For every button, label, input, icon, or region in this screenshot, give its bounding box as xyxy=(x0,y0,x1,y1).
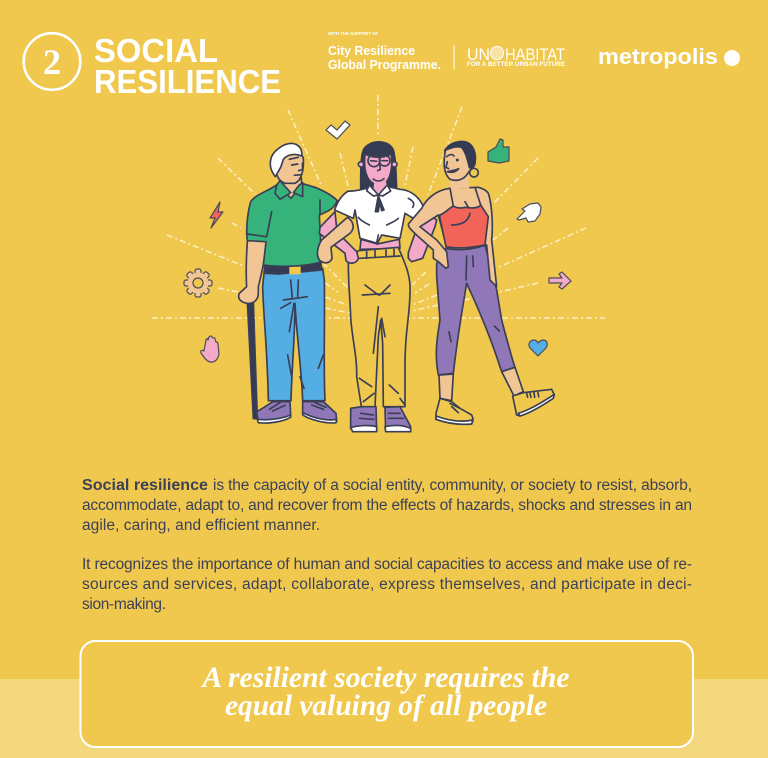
supporter logos: UN xyxy=(467,45,490,64)
icon: thumbs up xyxy=(488,139,509,163)
icon: arrow xyxy=(549,272,571,289)
supporter logos xyxy=(328,31,565,72)
section number badge: 2 xyxy=(43,42,61,82)
people illustration xyxy=(239,141,554,432)
supporter logos: HABITAT xyxy=(505,45,565,64)
callout xyxy=(80,641,693,747)
supporter logos: City Resilience xyxy=(328,44,415,58)
icon: gear xyxy=(184,269,212,297)
icon: pointing hand xyxy=(517,203,541,222)
supporter logos: FOR A BETTER URBAN FUTURE xyxy=(467,61,565,68)
icon: check mark xyxy=(326,121,350,139)
icon: heart xyxy=(529,340,547,356)
metropolis logo: metropolis xyxy=(598,44,718,69)
title xyxy=(94,32,281,100)
middle woman xyxy=(335,142,423,432)
body text: definition: Social resilience xyxy=(82,477,208,494)
section number badge xyxy=(24,33,80,90)
supporter logos: WITH THE SUPPORT OF xyxy=(328,31,378,36)
body text: definition: is the capacity of a social entity, community, or society to resist, absorb, xyxy=(213,477,692,494)
body text: definition: agile, caring, and efficient manner. xyxy=(82,517,320,534)
right woman xyxy=(408,141,554,424)
body text: definition: accommodate, adapt to, and recover from the effects of hazards, shocks and stresses in an xyxy=(82,497,692,514)
body text: human and social capacities xyxy=(82,556,692,613)
callout: equal valuing of all people xyxy=(225,690,547,722)
title: RESILIENCE xyxy=(94,63,281,100)
body text: human and social capacities: sources and services, adapt, collaborate, express themselves, and participate in deci- xyxy=(82,576,692,593)
icon: lightning bolt xyxy=(210,202,223,228)
interlinked arms xyxy=(317,210,437,263)
body text: human and social capacities: It recognizes the importance of human and social capacities to access and make use of re- xyxy=(82,556,692,573)
title: SOCIAL xyxy=(94,32,218,69)
body text: human and social capacities: sion-making. xyxy=(82,596,166,613)
icon: raised hand xyxy=(201,336,219,362)
supporter logos: Global Programme. xyxy=(328,58,441,72)
man with cane xyxy=(239,143,337,423)
callout: A resilient society requires the xyxy=(200,662,569,694)
radiating dashed rays xyxy=(152,95,605,318)
body text: definition xyxy=(82,477,692,534)
